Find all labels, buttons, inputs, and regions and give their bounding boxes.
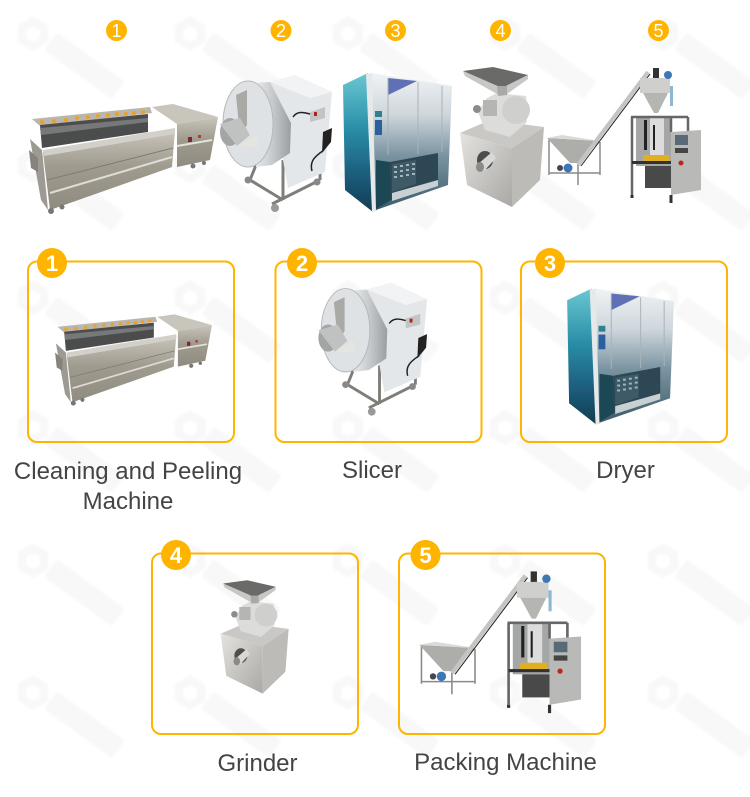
number badge	[37, 248, 67, 278]
panel: packing machine	[399, 540, 605, 776]
card frame	[152, 554, 358, 734]
machine: grinder	[460, 67, 544, 207]
number badge: 5	[419, 543, 432, 568]
machine: cleaning and peeling	[29, 104, 218, 214]
label: Cleaning and Peeling	[14, 458, 242, 485]
number badge	[161, 540, 191, 570]
step badge 3: 3	[390, 21, 401, 41]
panel: slicer	[276, 248, 482, 484]
step badge 1	[106, 20, 127, 41]
machine: packing	[547, 68, 701, 203]
step badge 3	[385, 20, 406, 41]
machine image	[55, 314, 212, 406]
card frame	[399, 554, 605, 734]
machine image	[419, 571, 581, 713]
number badge	[287, 248, 317, 278]
card frame	[28, 262, 234, 442]
label: Machine	[83, 488, 173, 515]
machine: slicer	[220, 75, 332, 212]
label: Grinder	[217, 750, 298, 777]
number badge: 4	[170, 543, 183, 568]
machine image	[567, 289, 674, 425]
machine image	[318, 283, 427, 416]
panel: cleaning and peeling machine	[14, 248, 242, 515]
step badge 4: 4	[495, 21, 506, 41]
number badge: 2	[296, 251, 308, 276]
panel: production line overview	[29, 20, 701, 214]
panel: grinder	[152, 540, 358, 777]
number badge	[535, 248, 565, 278]
machine image	[221, 580, 289, 694]
number badge: 1	[46, 251, 58, 276]
step badge 5	[648, 20, 669, 41]
card frame	[276, 262, 482, 442]
step badge 2	[270, 20, 292, 41]
machine: dryer	[343, 73, 452, 212]
step badge 4	[490, 20, 511, 41]
label: Dryer	[596, 457, 655, 484]
number badge	[410, 540, 440, 570]
label: Packing Machine	[414, 749, 597, 776]
number badge: 3	[544, 251, 556, 276]
panel: dryer	[521, 248, 727, 484]
card frame	[521, 262, 727, 442]
step badge 2: 2	[276, 21, 286, 41]
step badge 1: 1	[111, 21, 122, 41]
label: Slicer	[342, 457, 402, 484]
step badge 5: 5	[653, 21, 664, 41]
